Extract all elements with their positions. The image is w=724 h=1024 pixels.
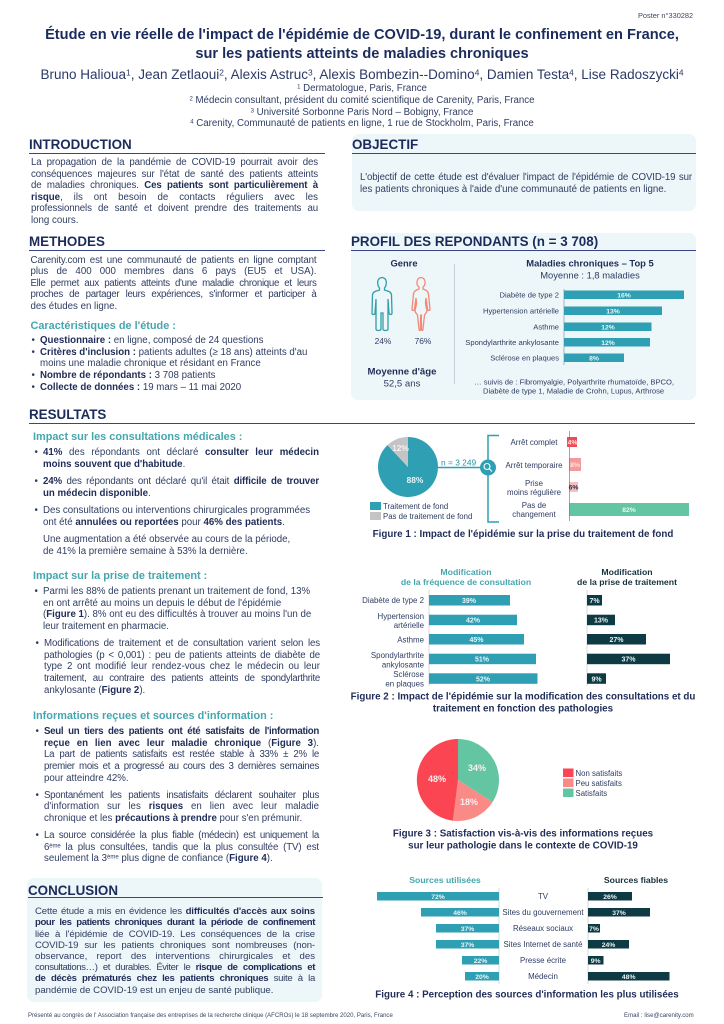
bar chart: maladies top 5: 12% — [601, 340, 615, 347]
genre: 24% — [375, 336, 392, 346]
bar chart: prise de traitement: 9% — [591, 676, 602, 683]
legend: satisfaction: Satisfaits — [576, 789, 607, 798]
labels: sources: Médecin — [528, 972, 558, 981]
caption: figure 3: Figure 3 : Satisfaction vis-à-vis des informations reçues — [393, 828, 654, 840]
bar chart: sources utilisées — [377, 888, 499, 984]
moyenne d'âge: Moyenne d'âge — [368, 366, 436, 378]
list: consultations — [34, 447, 319, 557]
list: traitement: ankylosante (Figure 2). — [44, 685, 145, 696]
legend: traitement: Pas de traitement de fond — [383, 512, 472, 521]
list: traitement: leur traitement en pharmacie. — [43, 621, 169, 632]
text: introduction: professionnels de santé et doivent prendre des traitements au — [31, 203, 318, 214]
figure 2 — [351, 567, 695, 714]
labels: impact: changement — [512, 510, 557, 519]
list: informations: reçue en lien avec leur maladie chronique (Figure 3). — [44, 738, 319, 749]
heading: objectif: OBJECTIF — [352, 137, 418, 152]
list: informations: La source considérée la plus fiable (médecin) est uniquement la — [44, 830, 319, 841]
caption: figure 3 — [393, 828, 654, 852]
labels: sources — [502, 892, 584, 981]
bar chart: impact sur traitement: 8% — [570, 462, 580, 469]
text: introduction: long cours. — [31, 215, 78, 226]
caption: figure 2: traitement en fonction des pathologies — [433, 704, 614, 714]
chart: genre et maladies chroniques — [368, 258, 684, 396]
bar chart: maladies top 5: Sclérose en plaques — [490, 354, 559, 362]
text: methodes: Carenity.com est une communauté de patients en ligne comptant — [30, 254, 316, 266]
poster number: Poster n°330282 — [638, 11, 693, 20]
text: methodes — [30, 254, 317, 312]
text: introduction: La propagation de la pandémie de COVID-19 pourrait avoir des — [31, 157, 318, 168]
bar chart: sources utilisées: 37% — [461, 926, 474, 933]
figure 3 — [393, 739, 654, 852]
bar chart: impact sur traitement — [567, 431, 689, 521]
bar chart: fréquence de consultation: 42% — [466, 618, 481, 625]
list: traitement: Parmi les 88% de patients prenant un traitement de fond, 13% — [43, 586, 310, 597]
heading: profil — [351, 233, 696, 251]
heading: maladies chroniques: Maladies chroniques – Top 5 — [526, 258, 654, 268]
pie chart: satisfaction — [417, 739, 499, 821]
list: informations: Seul un tiers des patients ont été satisfaits de l'information — [44, 726, 319, 737]
caption: figure 2: Figure 2 : Impact de l'épidémie sur la modification des consultations et du — [351, 692, 695, 702]
text: methodes: des études en ligne. — [30, 301, 117, 312]
list: informations: pour atteindre 42%. — [44, 773, 129, 784]
list: consultations: Des consultations ou interventions chirurgicales programmées — [43, 505, 310, 516]
subheading: consultations: Impact sur les consultations médicales : — [33, 430, 242, 442]
chart title: prise de traitement: Modification — [601, 567, 653, 577]
heading: maladies chroniques — [526, 258, 654, 280]
authors: Bruno Halioua1, Jean Zetlaoui2, Alexis Astruc3, Alexis Bombezin--Domino4, Damien Testa4, Lise Radoszycki4 — [40, 67, 684, 82]
bar chart: sources fiables: 9% — [591, 958, 601, 965]
text: methodes: proches de partager leurs expériences, s'informer et participer à — [30, 289, 316, 300]
legend: traitement: Traitement de fond — [383, 502, 448, 511]
labels: pathologies — [362, 596, 425, 688]
labels: impact: Prise — [525, 479, 544, 488]
heading: conclusion: CONCLUSION — [28, 883, 118, 898]
note: autres maladies: Diabète de type 1, Maladie de Crohn, Lupus, Arthrose — [483, 386, 664, 396]
heading: objectif — [352, 136, 696, 154]
bar chart: sources fiables: 26% — [603, 894, 617, 901]
panel: methodes — [29, 234, 325, 393]
bar chart: prise de traitement: 13% — [594, 618, 609, 625]
text: conclusion: liée à l'épidémie de COVID-19. Les conséquences de la crise — [35, 929, 315, 940]
labels: pathologies: en plaques — [385, 680, 424, 688]
caption: figure 1: Figure 1 : Impact de l'épidémie sur la prise du traitement de fond — [373, 529, 673, 540]
bar chart: sources utilisées: 72% — [431, 894, 445, 901]
bar chart: maladies top 5: 16% — [617, 292, 631, 299]
bar chart: maladies top 5: 12% — [601, 324, 615, 331]
bar chart: fréquence de consultation: 52% — [476, 676, 491, 683]
labels: sources: Sites du gouvernement — [502, 908, 584, 917]
bar chart: sources fiables: 24% — [602, 942, 615, 949]
subheading: caractéristiques de l'étude: Caractéristiques de l'étude : — [30, 320, 176, 332]
text: conclusion: Cette étude a mis en évidence les difficultés d'accès aux soins — [35, 906, 315, 917]
pie chart: traitement de fond: 12% — [392, 443, 409, 453]
text: introduction: conséquences majeures sur l'état de santé des patients atteints — [31, 169, 318, 180]
labels: pathologies: ankylosante — [382, 660, 425, 670]
bar chart: sources fiables — [588, 888, 670, 984]
list: informations: Spontanément les patients insatisfaits déclarent souhaiter plus — [44, 790, 319, 801]
list: caractéristiques: Questionnaire : en ligne, composé de 24 questions — [40, 335, 263, 346]
list: caractéristiques: Nombre de répondants : 3 708 patients — [40, 370, 216, 381]
caption: figure 4: Figure 4 : Perception des sources d'information les plus utilisées — [375, 990, 679, 1000]
bar chart: fréquence de consultation — [429, 590, 538, 686]
panel: conclusion — [27, 878, 322, 1002]
panel: impact sur la prise de traitement — [33, 570, 320, 696]
list: consultations: Une augmentation a été observée au cours de la période, — [43, 534, 290, 545]
list: caractéristiques — [32, 335, 307, 393]
labels: pathologies: Asthme — [397, 636, 425, 644]
text: conclusion: pour les patients chroniques durant la période de confinement — [35, 917, 315, 928]
figure 4 — [375, 875, 679, 1000]
bar chart: maladies top 5 — [465, 289, 684, 365]
genre — [372, 258, 432, 346]
heading: introduction: INTRODUCTION — [29, 137, 132, 152]
text: introduction: risque, ils ont besoin de contacts réguliers avec les — [31, 192, 318, 203]
text: conclusion: consultations…) et durables. Éviter le risque de complications et — [35, 962, 315, 973]
labels: impact: Arrêt complet — [511, 438, 558, 447]
moyenne d'âge: 52,5 ans — [384, 378, 421, 390]
text: methodes: Elle permet aux patients atteints d'une maladie chronique et leurs — [30, 278, 316, 289]
list: informations — [36, 726, 320, 864]
bar chart: maladies top 5: Spondylarthrite ankylosante — [465, 338, 559, 347]
list: traitement: (Figure 1). 8% ont eu des difficultés à trouver au moins l'un de — [43, 609, 311, 620]
list: traitement — [34, 586, 320, 696]
caption: figure 3: sur leur pathologie dans le contexte de COVID-19 — [408, 840, 638, 852]
list: caractéristiques: Critères d'inclusion : patients adultes (≥ 18 ans) atteints d'au — [40, 347, 307, 358]
footer: email: Email : lise@carenity.com — [624, 1012, 694, 1019]
labels: pathologies: Hypertension — [378, 612, 424, 621]
heading: methodes — [29, 233, 325, 251]
heading: conclusion — [28, 882, 323, 898]
text: conclusion — [35, 906, 316, 996]
connector: n = 3 249: n = 3 249 — [441, 458, 477, 468]
connector: n = 3 249 — [438, 436, 499, 522]
legend: satisfaction — [563, 768, 622, 798]
affiliations — [189, 83, 535, 129]
bar chart: sources fiables: 48% — [622, 974, 636, 981]
pie chart: satisfaction: 34% — [468, 763, 486, 773]
chart title: prise de traitement: de la prise de traitement — [577, 577, 677, 587]
panel: introduction — [29, 137, 325, 226]
affiliations: 3 Université Sorbonne Paris Nord – Bobigny, France — [251, 107, 473, 118]
subheading: informations: Informations reçues et sources d'information : — [33, 710, 273, 722]
list: consultations: moins souvent que d'habitude. — [43, 459, 185, 470]
heading: maladies chroniques: Moyenne : 1,8 maladies — [540, 270, 640, 280]
bar chart: sources utilisées: 20% — [475, 974, 489, 981]
labels: impact: Pas de — [522, 501, 547, 510]
list: traitement: type 2 ont modifié leur rendez-vous chez le médecin ou leur — [44, 661, 320, 672]
bar chart: maladies top 5: 8% — [589, 355, 599, 362]
bar chart: prise de traitement: 27% — [609, 637, 624, 644]
bar chart: sources utilisées: 22% — [474, 958, 487, 965]
labels: impact: moins régulière — [507, 488, 562, 497]
panel: objectif — [352, 134, 696, 211]
labels: sources: Réseaux sociaux — [513, 924, 573, 933]
heading: introduction — [29, 136, 325, 154]
list: traitement: en ont arrêté au moins un depuis le début de l'épidémie — [43, 598, 281, 609]
bar chart: sources utilisées: 37% — [461, 942, 474, 949]
genre: Genre — [390, 258, 418, 268]
list: traitement: Modifications de traitement et de consultation varient selon les — [44, 638, 320, 649]
list: consultations: de 41% la première semaine à 53% la dernière. — [43, 546, 248, 557]
panel: impact sur les consultations — [33, 430, 319, 557]
bar chart: fréquence de consultation: 39% — [462, 598, 477, 605]
bar chart: fréquence de consultation: 45% — [469, 637, 484, 644]
figure 1 — [370, 431, 689, 540]
labels: pathologies: Sclérose — [393, 670, 425, 679]
chart title: fréquence de consultation: Modification — [440, 567, 492, 577]
text: conclusion: pandémie de COVID-19 est un enjeu de santé publique. — [35, 985, 273, 996]
title: sur les patients atteints de maladies chroniques — [195, 46, 529, 62]
text: introduction — [31, 157, 318, 226]
list: informations: La part de patients satisfaits est restée stable à 33% ± 2% le — [44, 749, 319, 760]
text: introduction: de maladies chroniques. Ces patients sont particulièrement à — [31, 180, 318, 191]
bar chart: prise de traitement — [587, 590, 670, 686]
bar chart: maladies top 5: 13% — [606, 308, 620, 315]
list: caractéristiques: moins une maladie chronique et résidant en France — [40, 358, 261, 369]
legend: satisfaction: Peu satisfaits — [576, 779, 622, 788]
affiliations: 1 Dermatologue, Paris, France — [297, 83, 427, 94]
list: traitement: traitement, au contraire des patients atteints de spondylarthrite — [44, 673, 320, 684]
text: objectif: L'objectif de cette étude est d'évaluer l'impact de l'épidémie de COVID-19 sur — [360, 172, 692, 183]
bar chart: impact sur traitement: 6% — [569, 484, 578, 492]
genre: 76% — [415, 336, 432, 346]
panel: informations reçues — [33, 710, 320, 864]
pie chart: satisfaction: 18% — [460, 797, 478, 807]
text: conclusion: observance, report des interventions chirurgicales et des — [35, 951, 315, 962]
caption: figure 2 — [351, 692, 695, 714]
bar chart: sources utilisées: 46% — [453, 910, 467, 917]
text: conclusion: de décès prématurés chez les patients chroniques suite à la — [35, 973, 315, 984]
labels: sources: Presse écrite — [520, 956, 567, 965]
footer: congrès: Présenté au congrès de l' Association française des entreprises de la recherche clinique (AFCROs) le 18 septembre 2020, Paris, France — [28, 1013, 393, 1019]
list: consultations: 24% des répondants ont déclaré qu'il était difficile de trouver — [43, 476, 319, 487]
bar chart: maladies top 5: Diabète de type 2 — [499, 290, 559, 300]
list: consultations: 41% des répondants ont déclaré consulter leur médecin — [43, 447, 319, 458]
subheading: traitement: Impact sur la prise de traitement : — [33, 570, 207, 582]
icon: femme — [412, 278, 430, 330]
bar chart: prise de traitement: 7% — [589, 598, 600, 605]
legend: traitement — [370, 502, 472, 521]
labels: sources: TV — [538, 892, 549, 901]
text: objectif: les patients chroniques à l'aide d'une communauté de patients en ligne. — [360, 184, 666, 195]
note: autres maladies: … suivis de : Fibromyalgie, Polyarthrite rhumatoïde, BPCO, — [474, 378, 674, 386]
title — [45, 26, 679, 62]
heading: profil: PROFIL DES REPONDANTS (n = 3 708) — [351, 234, 598, 249]
moyenne d'âge — [368, 366, 436, 390]
labels: pathologies: Diabète de type 2 — [362, 596, 424, 605]
list: informations: seulement la 3ème plus digne de confiance (Figure 4). — [44, 853, 273, 864]
chart title: sources fiables: Sources fiables — [604, 875, 668, 885]
bar chart: maladies top 5: Hypertension artérielle — [483, 306, 559, 316]
list: traitement: pathologies (p < 0,001) : peu de patients atteints de diabète de — [44, 650, 320, 661]
pie chart: satisfaction: 48% — [428, 774, 446, 784]
labels: sources: Sites Internet de santé — [504, 940, 583, 949]
heading: resultats: RESULTATS — [29, 407, 106, 422]
list: consultations: ont été annulées ou reportées pour 46% des patients. — [43, 517, 285, 528]
list: informations: premier mois et a progressé au cours des 3 dernières semaines — [44, 761, 319, 772]
affiliations: 4 Carenity, Communauté de patients en ligne, 1 rue de Stockholm, Paris, France — [190, 118, 534, 129]
list: informations: chronique et les précautions à prendre pour s'en prémunir. — [44, 813, 302, 824]
list: informations: 6ème la plus consultées, tandis que la plus consultée (TV) est — [44, 842, 319, 853]
bar chart: sources fiables: 7% — [589, 926, 599, 933]
note: autres maladies — [474, 378, 674, 396]
pie chart: traitement de fond: 88% — [407, 475, 424, 485]
chart title: fréquence de consultation: de la fréquence de consultation — [401, 577, 531, 587]
bar chart: maladies top 5: Asthme — [533, 322, 559, 332]
text: objectif — [360, 172, 692, 195]
text: methodes: plus de 400 000 membres dans 6 pays (EU5 et USA). — [30, 266, 316, 277]
chart title: prise de traitement — [577, 567, 677, 587]
icon: homme — [372, 278, 392, 330]
chart title: sources utilisées: Sources utilisées — [409, 875, 481, 885]
icon: loupe — [480, 460, 496, 476]
title: Étude en vie réelle de l'impact de l'épidémie de COVID-19, durant le confinement en France, — [45, 27, 679, 43]
bar chart: impact sur traitement: 4% — [568, 440, 577, 446]
list: consultations: un médecin disponible. — [43, 488, 151, 499]
affiliations: 2 Médecin consultant, président du comité scientifique de Carenity, Paris, France — [189, 95, 535, 106]
legend: satisfaction: Non satisfaits — [576, 769, 622, 778]
labels: impact — [505, 438, 563, 519]
bar chart: sources fiables: 37% — [612, 910, 626, 917]
bar chart: prise de traitement: 37% — [621, 657, 636, 664]
bar chart: fréquence de consultation: 51% — [475, 657, 490, 664]
heading: methodes: METHODES — [29, 234, 105, 249]
labels: pathologies: Spondylarthrite — [371, 651, 425, 660]
chart title: fréquence de consultation — [401, 567, 531, 587]
labels: impact: Arrêt temporaire — [505, 461, 563, 470]
text: conclusion: COVID-19 sur les patients chroniques sont nombreuses (non- — [35, 940, 315, 951]
pie chart: traitement de fond — [378, 437, 438, 497]
list: informations: d'information sur les risques en lien avec leur maladie — [44, 801, 319, 812]
panel: profil des répondants — [351, 233, 696, 400]
bar chart: impact sur traitement: 82% — [622, 507, 636, 514]
labels: pathologies: artérielle — [394, 621, 425, 630]
list: caractéristiques: Collecte de données : 19 mars – 11 mai 2020 — [40, 382, 241, 393]
